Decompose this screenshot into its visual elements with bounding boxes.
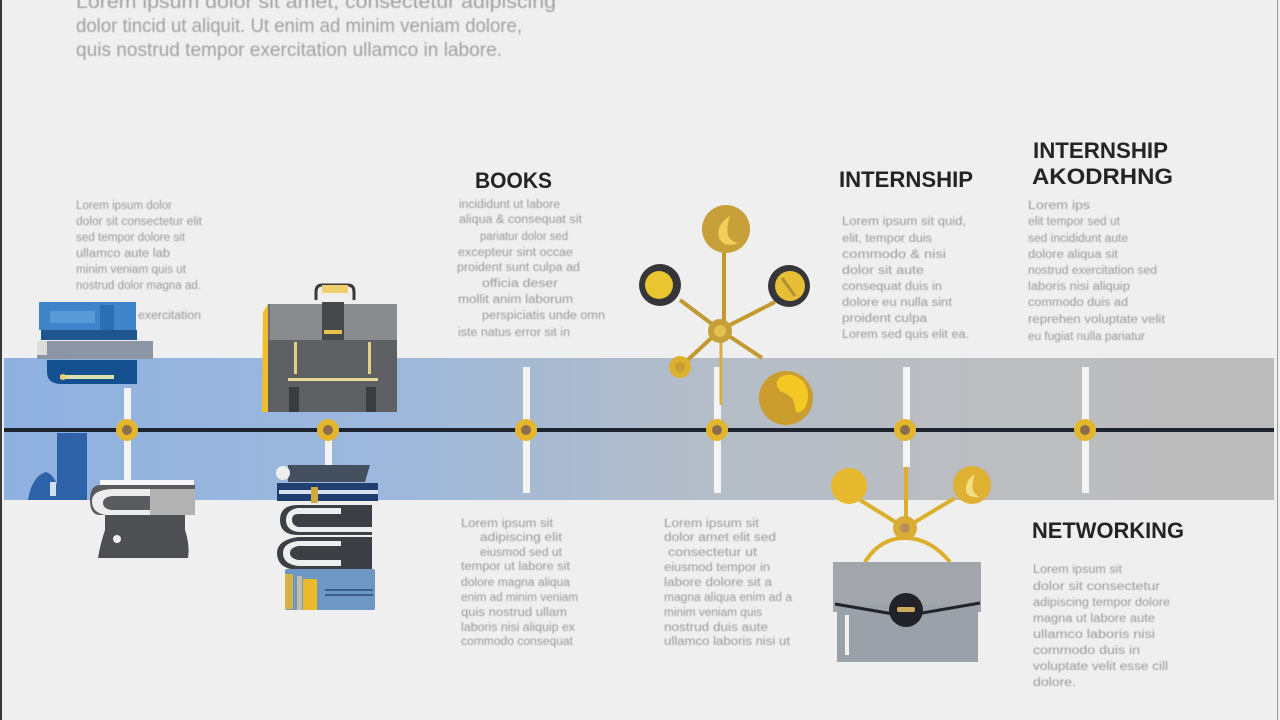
text block: networking: voluptate velit esse cill <box>1033 661 1168 673</box>
text block: internship <box>842 216 969 341</box>
text block: internship: Lorem ipsum sit quid, <box>842 216 966 228</box>
intro text <box>76 0 556 61</box>
text block: internship: dolor sit aute <box>842 265 924 277</box>
text block: lower column 1: adipiscing elit <box>480 532 563 544</box>
text block: column 1 <box>76 200 203 322</box>
text block: right column <box>1028 200 1166 343</box>
text block: lower column 1: quis nostrud ullam <box>461 607 567 619</box>
text block: networking: magna ut labore aute <box>1033 613 1155 625</box>
text block: books: aliqua & consequat sit <box>459 214 583 226</box>
text block: books: excepteur sint occae <box>458 247 573 259</box>
timeline band <box>4 358 1274 500</box>
text block: lower column 1 <box>461 518 578 648</box>
text block: lower column 1: laboris nisi aliquip ex <box>461 622 575 634</box>
text block: right column: dolore aliqua sit <box>1028 249 1119 261</box>
text block: lower column 1: dolore magna aliqua <box>461 577 571 589</box>
text block: column 1: sed tempor dolore sit <box>76 232 186 244</box>
timeline nodes <box>116 419 1096 441</box>
text block: column 1: ullamco aute lab <box>76 248 170 260</box>
text block: lower column 1: commodo consequat <box>461 636 574 648</box>
icon: book stack dark <box>276 465 378 610</box>
text block: networking: dolor sit consectetur <box>1033 581 1160 593</box>
text block: books: perspiciatis unde omn <box>482 310 605 322</box>
text block: lower column 2: ullamco laboris nisi ut <box>664 636 791 648</box>
text block: internship: Lorem sed quis elit ea. <box>842 329 969 341</box>
text block: lower column 2: minim veniam quis <box>664 607 762 619</box>
icon: gray machine <box>90 480 195 558</box>
text block: internship: elit, tempor duis <box>842 233 932 245</box>
text block: lower column 1: tempor ut labore sit <box>461 561 571 573</box>
icon: briefcase with gold network <box>831 466 991 662</box>
heading: internship 2: AKODRHNG <box>1032 164 1173 189</box>
heading: networking: NETWORKING <box>1032 518 1184 543</box>
text block: internship: consequat duis in <box>842 281 942 293</box>
text block: column 1: minim veniam quis ut <box>76 264 187 276</box>
icon: gold coin <box>759 371 813 425</box>
text block: right column: elit tempor sed ut <box>1028 216 1121 228</box>
text block: networking <box>1033 564 1170 689</box>
text block: right column: nostrud exercitation sed <box>1028 265 1157 277</box>
text block: column 1: dolor sit consectetur elit <box>76 216 203 228</box>
text block: lower column 2: eiusmod tempor in <box>664 562 770 574</box>
icon: gold network <box>639 205 810 405</box>
text block: internship: commodo & nisi <box>842 249 946 261</box>
text block: books: proident sunt culpa ad <box>457 262 580 274</box>
text block: right column: reprehen voluptate velit <box>1028 314 1166 326</box>
text block: column 1: Lorem ipsum dolor <box>76 200 172 212</box>
text block: networking: Lorem ipsum sit <box>1033 564 1123 576</box>
text block: networking: adipiscing tempor dolore <box>1033 597 1170 609</box>
text block: column 1: nostrud dolor magna ad. <box>76 280 201 292</box>
text block: books <box>457 199 605 339</box>
icon: blue pillar <box>28 433 87 500</box>
heading: books: BOOKS <box>475 168 552 193</box>
text block: books: incididunt ut labore <box>459 199 560 211</box>
timeline axis <box>4 428 1274 432</box>
heading: internship 2 <box>1032 138 1173 189</box>
text block: lower column 2: consectetur ut <box>668 547 758 559</box>
text block: right column: commodo duis ad <box>1028 297 1128 309</box>
text block: lower column 2: Lorem ipsum sit <box>664 518 760 530</box>
text block: networking: commodo duis in <box>1033 645 1140 657</box>
text block: lower column 1: enim ad minim veniam <box>461 592 578 604</box>
intro text: quis nostrud tempor exercitation ullamco in labore. <box>76 40 502 61</box>
text block: internship: dolore eu nulla sint <box>842 297 953 309</box>
text block: lower column 1: Lorem ipsum sit <box>461 518 554 530</box>
text block: right column: sed incididunt aute <box>1028 233 1128 245</box>
text block: networking: ullamco laboris nisi <box>1033 629 1155 641</box>
text block: lower column 2: magna aliqua enim ad a <box>664 592 793 604</box>
text block: books: iste natus error sit in <box>458 327 570 339</box>
text block: right column: Lorem ips <box>1028 200 1090 212</box>
text block: books: mollit anim laborum <box>458 294 573 306</box>
text block: lower column 2: nostrud duis aute <box>664 622 768 634</box>
text block: right column: eu fugiat nulla pariatur <box>1028 331 1145 343</box>
text block: lower column 2 <box>664 518 793 648</box>
text block: right column: laboris nisi aliquip <box>1028 281 1130 293</box>
text block: books: pariatur dolor sed <box>480 231 568 243</box>
text block: networking: dolore. <box>1033 677 1076 689</box>
text block: books: officia deser <box>482 278 558 290</box>
text block: lower column 2: dolor amet elit sed <box>664 532 776 544</box>
heading: internship 2: INTERNSHIP <box>1033 138 1168 163</box>
icon: briefcase dark <box>262 285 397 412</box>
stems <box>124 367 1089 493</box>
heading: internship: INTERNSHIP <box>839 167 973 192</box>
text block: lower column 1: eiusmod sed ut <box>480 547 563 559</box>
icon: book stack blue <box>37 302 153 384</box>
text block: column 1: exercitation <box>138 310 201 322</box>
text block: internship: proident culpa <box>842 313 928 325</box>
intro text: dolor tincid ut aliquit. Ut enim ad minim veniam dolore, <box>76 16 522 37</box>
text block: lower column 2: labore dolore sit a <box>664 577 773 589</box>
